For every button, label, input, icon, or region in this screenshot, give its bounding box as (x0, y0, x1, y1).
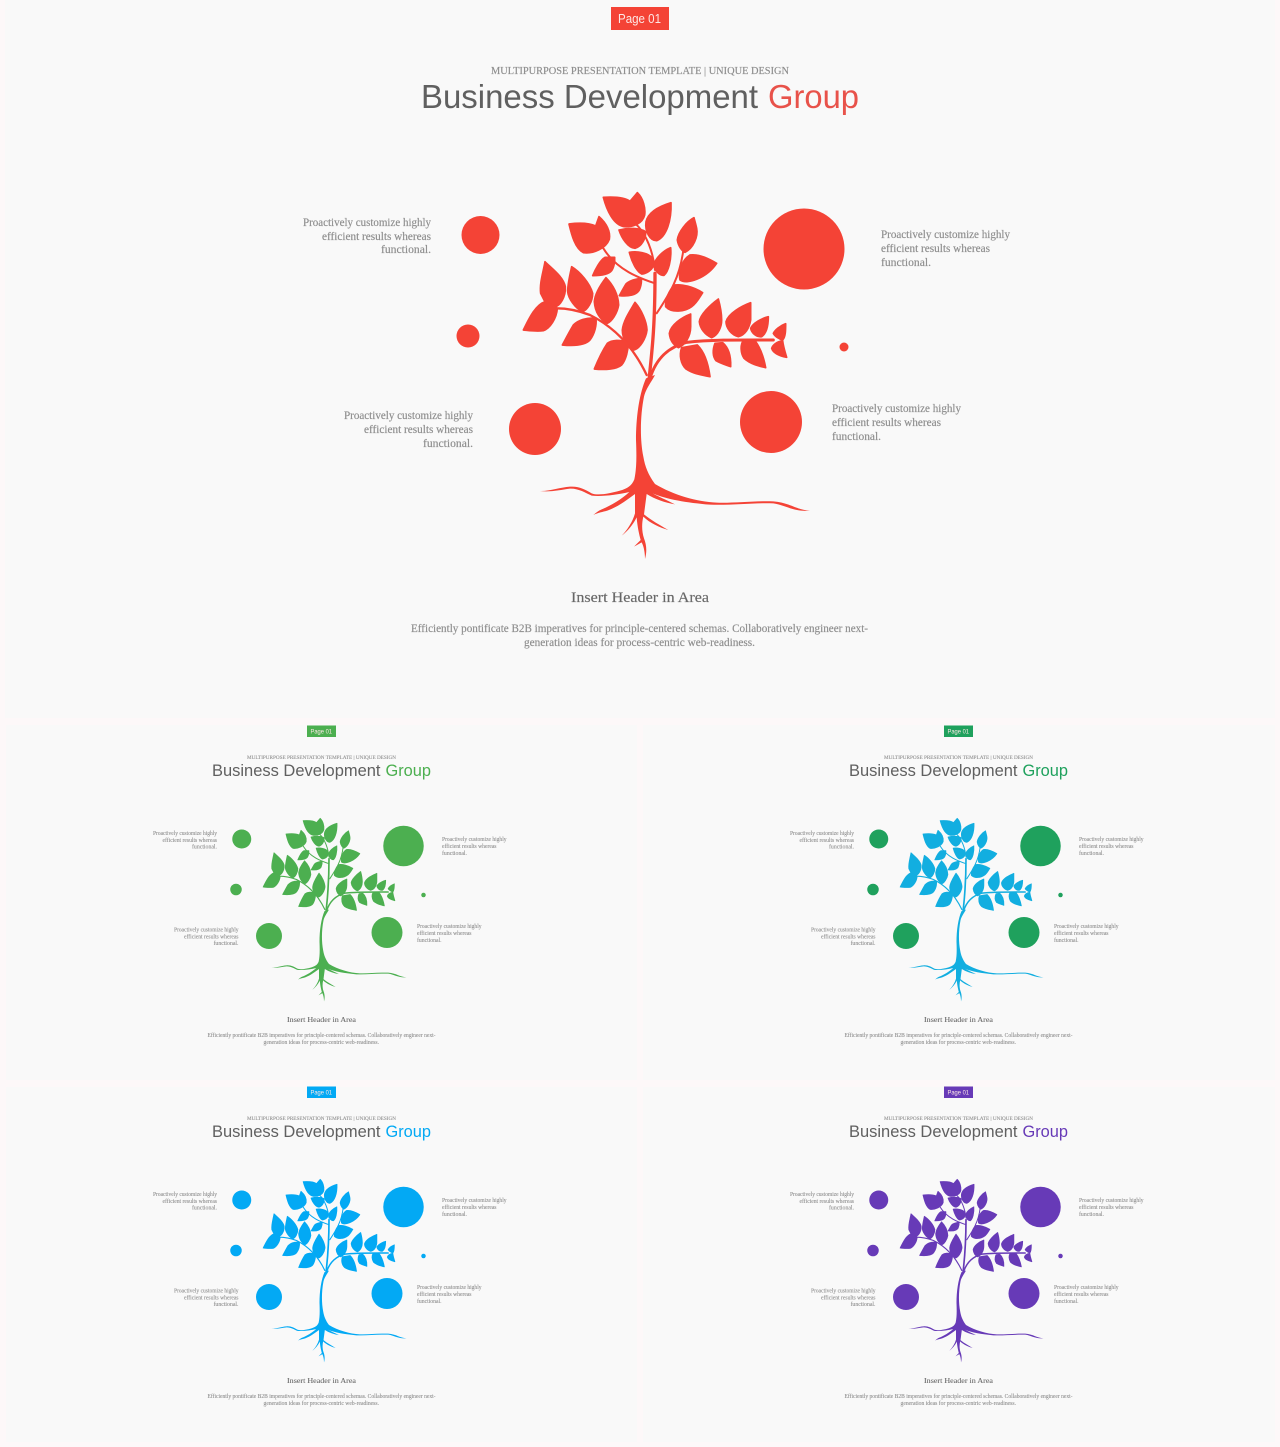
callout: top left: functional. (192, 844, 217, 850)
callout: bottom right (417, 924, 482, 944)
callout: bottom right: efficient results whereas (1054, 930, 1109, 937)
callout: top left (153, 831, 218, 850)
callout: top right: efficient results whereas (1079, 1204, 1134, 1211)
header: Insert Header in Area (924, 1015, 994, 1024)
callout: top right: efficient results whereas (1079, 843, 1134, 850)
title: Business Development (849, 762, 1018, 780)
icon: tree (900, 818, 1043, 1001)
description: Efficiently pontificate B2B imperatives for principle-centered schemas. Collaboratively engineer next- (411, 623, 868, 635)
callout: top left: Proactively customize highly (790, 1192, 854, 1198)
callout: bottom left: Proactively customize highly (811, 928, 876, 934)
callout: top left (153, 1192, 218, 1212)
callout: top right: functional. (881, 255, 931, 269)
callout: top right: functional. (442, 1211, 467, 1218)
callout: bottom right: Proactively customize highly (417, 924, 482, 930)
callout: bottom left: functional. (214, 1301, 239, 1308)
title: Business Development (849, 1123, 1018, 1141)
title: Group (386, 1123, 431, 1141)
panel: red slide (303, 7, 1010, 649)
callout: top right: Proactively customize highly (1079, 837, 1144, 843)
callout: bottom right: functional. (417, 937, 442, 944)
description (208, 1032, 436, 1046)
callout: top left: Proactively customize highly (303, 215, 431, 229)
icon: tree with roots (523, 193, 810, 559)
page badge: Page 01 (310, 1090, 332, 1096)
callout: top right: functional. (442, 850, 467, 857)
callout: top left: efficient results whereas (162, 837, 218, 844)
circles (230, 826, 426, 949)
description: Efficiently pontificate B2B imperatives for principle-centered schemas. Collaboratively engineer next- (844, 1393, 1073, 1400)
callout: bottom right: efficient results whereas (417, 930, 472, 937)
callout: bottom left (811, 928, 876, 947)
callout: top right (1079, 837, 1144, 857)
subtitle: MULTIPURPOSE PRESENTATION TEMPLATE | UNIQUE DESIGN (884, 755, 1033, 761)
title: Group (1022, 762, 1068, 780)
callout: top right: Proactively customize highly (1079, 1198, 1144, 1204)
callout: bottom left: efficient results whereas (821, 1294, 876, 1302)
callout: bottom left: efficient results whereas (184, 934, 239, 940)
description: generation ideas for process-centric web-readiness. (264, 1039, 380, 1046)
callout: bottom right (1054, 924, 1118, 944)
callout: top left (790, 831, 855, 850)
callout: bottom left: functional. (423, 436, 473, 450)
icon: tree (900, 1179, 1043, 1362)
callout: bottom left: efficient results whereas (364, 422, 473, 436)
callout: top left: efficient results whereas (162, 1198, 218, 1205)
panel: teal slide (790, 726, 1144, 1046)
description: Efficiently pontificate B2B imperatives for principle-centered schemas. Collaboratively engineer next- (844, 1032, 1073, 1039)
callout: bottom left: efficient results whereas (821, 934, 876, 940)
callout: top right: Proactively customize highly (881, 227, 1010, 241)
callout: bottom left: functional. (850, 1301, 876, 1308)
title: Business Development (421, 78, 758, 115)
page badge: Page 01 (310, 728, 332, 736)
callout: bottom left: Proactively customize highly (811, 1288, 876, 1294)
callout: top left: Proactively customize highly (790, 831, 854, 837)
panel: green slide (153, 726, 506, 1046)
circles (456, 208, 848, 455)
title: Group (768, 78, 859, 115)
subtitle: MULTIPURPOSE PRESENTATION TEMPLATE | UNIQUE DESIGN (884, 1116, 1033, 1122)
icon: tree (263, 1179, 406, 1362)
callout: bottom right: efficient results whereas (832, 415, 941, 429)
callout: top right: functional. (1079, 850, 1104, 857)
callout: top left: functional. (192, 1204, 217, 1212)
callout: bottom right: Proactively customize highly (1054, 1285, 1118, 1291)
description: Efficiently pontificate B2B imperatives for principle-centered schemas. Collaboratively engineer next- (208, 1393, 436, 1400)
subtitle: MULTIPURPOSE PRESENTATION TEMPLATE | UNIQUE DESIGN (247, 1116, 396, 1122)
page badge (944, 726, 973, 737)
page badge: Page 01 (948, 728, 969, 736)
callout: bottom right: functional. (1054, 937, 1079, 944)
callout: bottom right: Proactively customize highly (832, 401, 961, 415)
callout: top left: Proactively customize highly (153, 831, 217, 837)
callout: top left: efficient results whereas (800, 837, 855, 844)
header: Insert Header in Area (287, 1015, 357, 1024)
callout: top right: efficient results whereas (442, 843, 497, 850)
callout: bottom right (417, 1285, 482, 1305)
callout: top left: Proactively customize highly (153, 1192, 217, 1198)
callout: top left: efficient results whereas (322, 229, 431, 243)
circles (867, 1187, 1063, 1310)
description: generation ideas for process-centric web-readiness. (900, 1039, 1017, 1046)
callout: top right: functional. (1079, 1211, 1104, 1218)
callout: bottom left (174, 928, 239, 947)
callout: bottom right (832, 401, 961, 443)
description: Efficiently pontificate B2B imperatives for principle-centered schemas. Collaboratively engineer next- (208, 1032, 436, 1039)
circles (867, 826, 1063, 949)
callout: top right (1079, 1198, 1144, 1218)
callout: top right: Proactively customize highly (442, 837, 506, 843)
callout: top left: functional. (381, 242, 431, 256)
title: Business Development (212, 762, 381, 780)
callout: bottom left (344, 408, 473, 450)
page badge (944, 1086, 973, 1098)
callout: top left: functional. (829, 844, 854, 850)
callout: top right: Proactively customize highly (442, 1198, 506, 1204)
callout: bottom left: Proactively customize highly (174, 1288, 238, 1294)
page badge (307, 1086, 336, 1098)
description: generation ideas for process-centric web-readiness. (264, 1400, 380, 1407)
callout: bottom right: functional. (417, 1298, 442, 1305)
callout: bottom left: efficient results whereas (184, 1294, 239, 1302)
description (208, 1393, 436, 1407)
callout: bottom left: functional. (850, 940, 876, 947)
header: Insert Header in Area (571, 590, 709, 606)
callout: bottom right: functional. (1054, 1298, 1079, 1305)
callout: bottom left: Proactively customize highly (174, 928, 238, 934)
callout: top left: functional. (829, 1204, 854, 1212)
callout: bottom right (1054, 1285, 1118, 1305)
callout: top left: efficient results whereas (800, 1198, 855, 1205)
page badge (307, 726, 336, 737)
page badge: Page 01 (948, 1090, 969, 1096)
description: generation ideas for process-centric web-readiness. (900, 1400, 1017, 1407)
subtitle: MULTIPURPOSE PRESENTATION TEMPLATE | UNIQUE DESIGN (247, 755, 396, 761)
callout: bottom left (811, 1288, 876, 1308)
callout: top right (442, 837, 506, 857)
callout: bottom right: Proactively customize highly (1054, 924, 1118, 930)
icon: tree (263, 818, 406, 1001)
callout: bottom right: efficient results whereas (417, 1291, 472, 1298)
subtitle: MULTIPURPOSE PRESENTATION TEMPLATE | UNIQUE DESIGN (491, 65, 789, 77)
callout: top right: efficient results whereas (881, 241, 990, 255)
callout: top right (881, 227, 1010, 269)
callout: top right: efficient results whereas (442, 1204, 497, 1211)
callout: top right (442, 1198, 506, 1218)
callout: bottom left (174, 1288, 239, 1308)
title: Group (386, 762, 431, 780)
callout: top left (303, 215, 431, 256)
callout: bottom left: Proactively customize highly (344, 408, 473, 422)
description (411, 623, 868, 649)
title: Business Development (212, 1123, 381, 1141)
panel: blue slide (153, 1086, 506, 1407)
title: Group (1022, 1123, 1068, 1141)
page badge (611, 7, 669, 30)
description: generation ideas for process-centric web-readiness. (524, 637, 755, 649)
circles (230, 1187, 426, 1310)
header: Insert Header in Area (287, 1376, 357, 1385)
callout: bottom left: functional. (214, 940, 239, 947)
page badge: Page 01 (618, 11, 661, 26)
description (844, 1032, 1073, 1046)
description (844, 1393, 1073, 1407)
callout: top left (790, 1192, 855, 1212)
panel: purple slide (790, 1086, 1144, 1407)
callout: bottom right: efficient results whereas (1054, 1291, 1109, 1298)
callout: bottom right: Proactively customize highly (417, 1285, 482, 1291)
callout: bottom right: functional. (832, 429, 881, 443)
header: Insert Header in Area (924, 1376, 994, 1385)
